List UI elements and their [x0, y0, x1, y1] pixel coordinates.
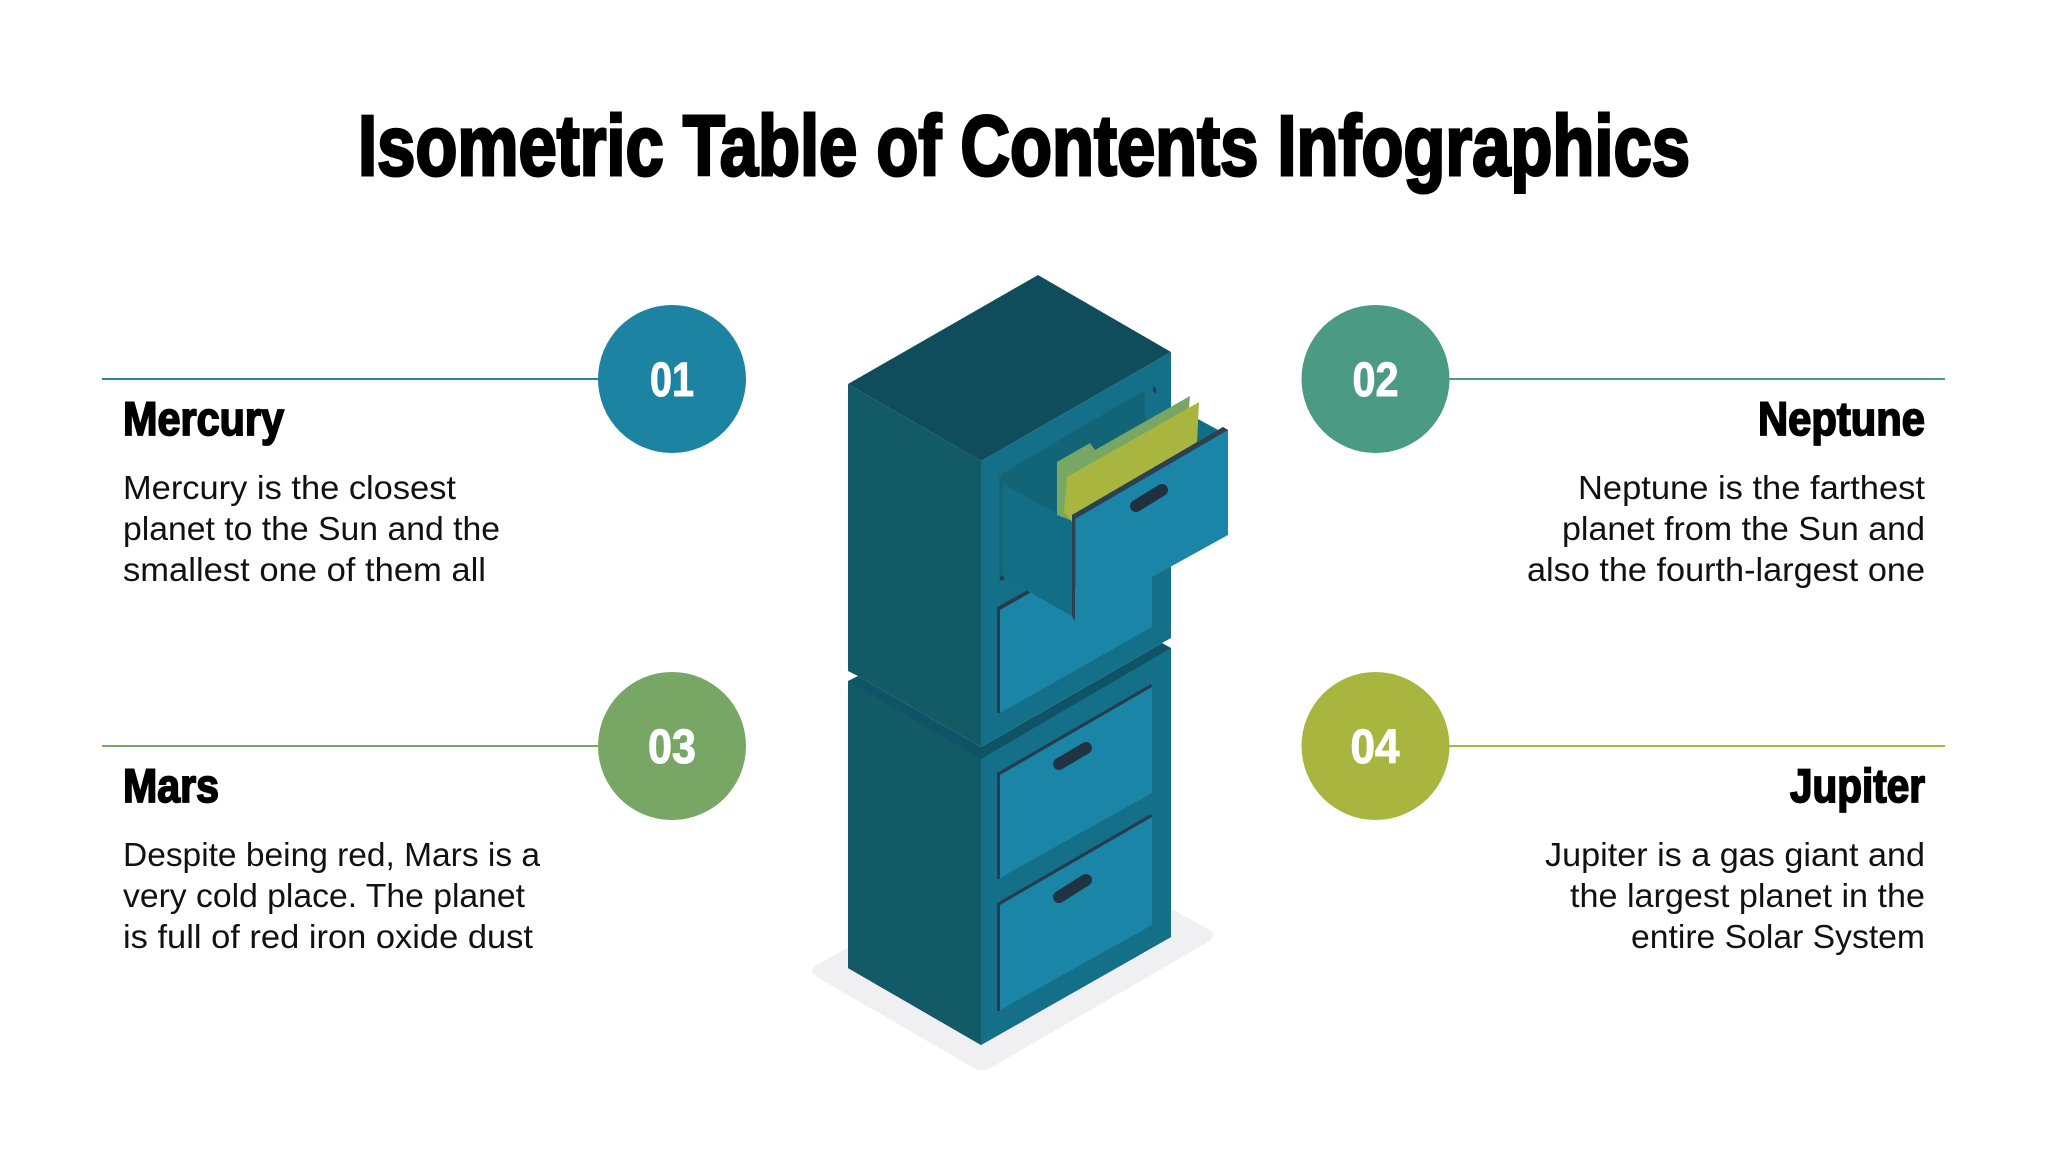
number badge 02: 02 — [1352, 354, 1398, 407]
body text: Mars: very cold place. The planet — [123, 877, 525, 914]
closed drawer below open drawer — [997, 577, 1152, 713]
heading: Jupiter: Jupiter — [1790, 759, 1925, 812]
title: Isometric Table of Contents Infographics — [358, 99, 1690, 194]
body text: Mars — [123, 836, 541, 955]
heading: Mars: Mars — [123, 759, 219, 812]
body text: Mercury: Mercury is the closest — [123, 469, 456, 506]
body text: Jupiter: Jupiter is a gas giant and — [1545, 836, 1925, 873]
body text: Mars: Despite being red, Mars is a — [123, 836, 541, 873]
lower cabinet — [848, 643, 1171, 1045]
number badge 04 — [1302, 672, 1450, 820]
body text: Jupiter — [1545, 836, 1925, 955]
number badge 04: 04 — [1350, 721, 1400, 774]
body text: Mercury — [123, 469, 500, 588]
number badge 03 — [598, 672, 746, 820]
body text: Mercury: planet to the Sun and the — [123, 510, 500, 547]
panel: 01 Mercury — [102, 305, 746, 588]
number badge 01: 01 — [650, 354, 694, 407]
number badge 02 — [1302, 305, 1450, 453]
open drawer front — [1072, 427, 1228, 640]
body text: Mercury: smallest one of them all — [123, 551, 486, 588]
open drawer cavity — [999, 390, 1145, 577]
floor shadow — [812, 910, 1213, 1070]
number badge 03: 03 — [648, 721, 696, 774]
panel: 02 Neptune — [1302, 305, 1945, 588]
body text: Neptune: Neptune is the farthest — [1578, 469, 1925, 506]
panel: 03 Mars — [102, 672, 746, 955]
open drawer far inner wall — [1190, 419, 1220, 450]
body text: Neptune: planet from the Sun and — [1562, 510, 1925, 547]
body text: Neptune: also the fourth-largest one — [1527, 551, 1925, 588]
folder: green — [1057, 396, 1190, 520]
drawer: second from bottom — [997, 684, 1152, 879]
body text: Neptune — [1527, 469, 1925, 588]
heading: Neptune: Neptune — [1758, 392, 1925, 445]
upper cabinet — [848, 275, 1228, 747]
folder: yellow — [1064, 402, 1199, 522]
body text: Mars: is full of red iron oxide dust — [123, 918, 533, 955]
body text: Jupiter: entire Solar System — [1631, 918, 1925, 955]
heading: Mercury: Mercury — [123, 392, 284, 445]
drawer: bottom — [997, 814, 1152, 1011]
open drawer side — [1003, 484, 1072, 616]
body text: Jupiter: the largest planet in the — [1570, 877, 1925, 914]
number badge 01 — [598, 305, 746, 453]
panel: 04 Jupiter — [1302, 672, 1945, 955]
illustration: isometric filing cabinet — [812, 275, 1228, 1070]
